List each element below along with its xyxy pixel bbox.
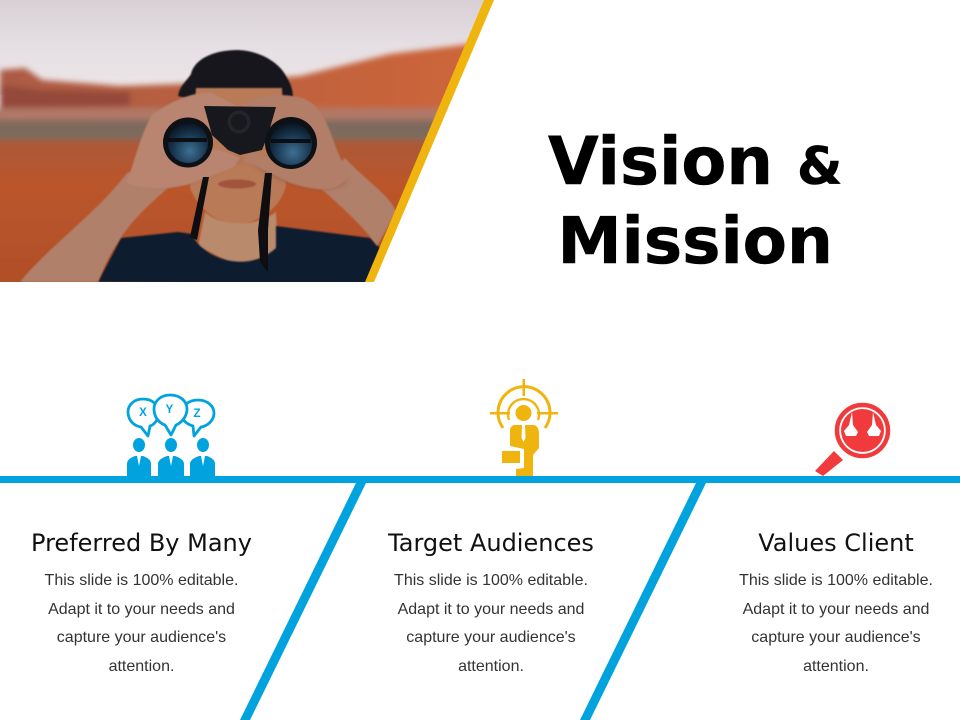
yellow diagonal stripe xyxy=(365,0,494,282)
face xyxy=(190,88,286,225)
focus wheel xyxy=(228,110,250,134)
title: Vision xyxy=(548,124,773,200)
mouth xyxy=(218,180,256,188)
column 3: values client: Values Client xyxy=(758,529,914,557)
column 2: target audiences: capture your audience's xyxy=(406,629,576,646)
column 1: preferred by many xyxy=(31,529,252,675)
right hand xyxy=(240,95,347,189)
title xyxy=(548,124,842,279)
icon: people with XYZ speech bubbles: X xyxy=(139,407,147,419)
title: Mission xyxy=(558,204,833,279)
column 1: preferred by many: Preferred By Many xyxy=(31,529,252,557)
icon: magnifier with client xyxy=(815,405,888,476)
shirt xyxy=(98,226,380,285)
column 3: values client: capture your audience's xyxy=(751,629,921,646)
left hand xyxy=(126,93,240,188)
icon: people with XYZ speech bubbles xyxy=(127,395,215,476)
column 2: target audiences: This slide is 100% editable. xyxy=(394,572,588,589)
column 3: values client: Adapt it to your needs and xyxy=(743,601,929,618)
column 3: values client xyxy=(739,529,933,675)
diagonal divider 1 xyxy=(240,483,366,720)
column 1: preferred by many: capture your audience's xyxy=(57,629,226,646)
column 1: preferred by many: This slide is 100% editable. xyxy=(45,572,238,589)
column 3: values client: attention. xyxy=(803,658,869,675)
icon: people with XYZ speech bubbles: Y xyxy=(166,404,174,416)
neck xyxy=(198,212,278,268)
binocular body xyxy=(204,106,276,155)
icon: people with XYZ speech bubbles: Z xyxy=(193,408,201,420)
title: & xyxy=(797,137,842,197)
column 1: preferred by many: Adapt it to your needs and xyxy=(48,601,235,618)
column 1: preferred by many: attention. xyxy=(109,658,174,675)
lens right xyxy=(265,117,317,169)
diagonal divider 2 xyxy=(580,483,706,720)
column 2: target audiences xyxy=(387,529,594,675)
arms xyxy=(20,172,170,282)
lens left xyxy=(163,118,213,168)
icon: target person with briefcase xyxy=(490,379,558,476)
straps xyxy=(190,177,209,240)
hand shadow xyxy=(238,160,346,190)
column 2: target audiences: Adapt it to your needs and xyxy=(398,601,584,618)
hair xyxy=(177,49,294,98)
horizontal blue line xyxy=(0,476,960,483)
column 3: values client: This slide is 100% editable. xyxy=(739,572,933,589)
column 2: target audiences: attention. xyxy=(458,658,524,675)
column 2: target audiences: Target Audiences xyxy=(387,529,594,557)
photo: man with binoculars xyxy=(0,0,510,290)
